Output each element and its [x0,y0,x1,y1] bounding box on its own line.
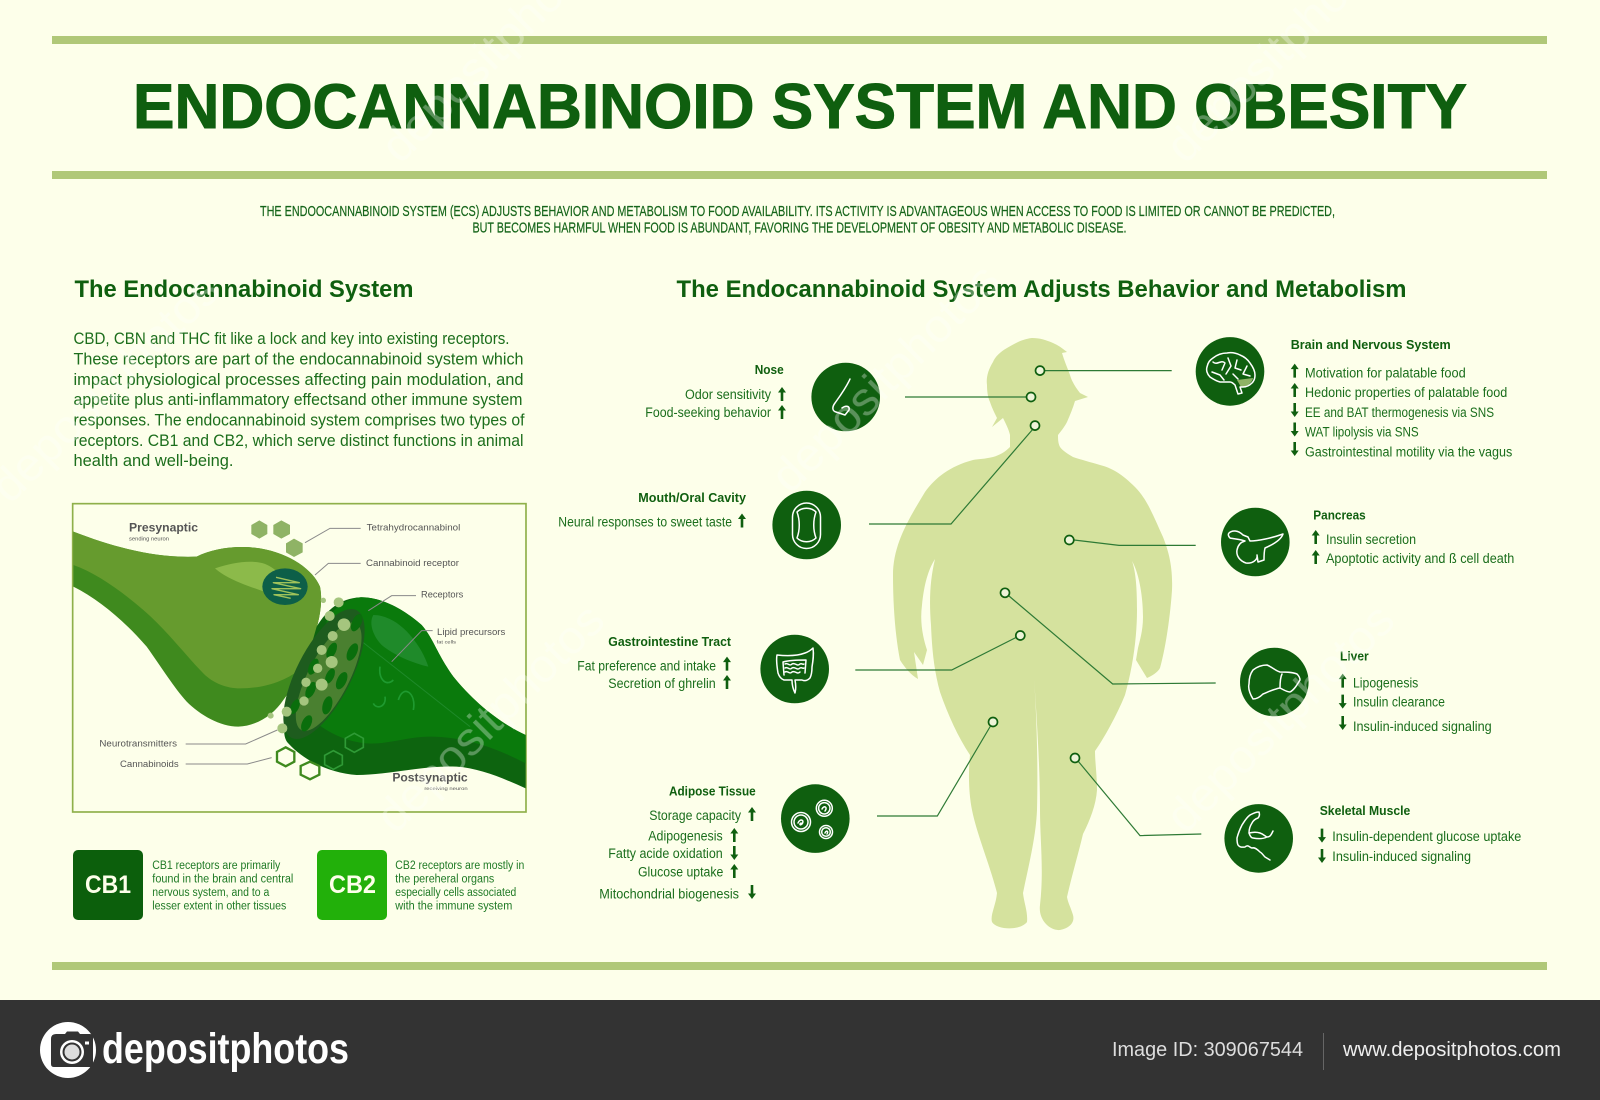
panel: gastrointestinal tract: Secretion of ghrelin [608,676,716,691]
panel: nose: Food-seeking behavior [645,405,771,420]
presynaptic neuron [73,532,321,727]
panel: nose: Nose [755,362,784,377]
watermark [0,0,1404,842]
diagram labels [99,521,506,792]
panel: liver: Lipogenesis [1353,676,1419,691]
diagram labels: Neurotransmitters [99,739,178,749]
receptor vesicle [262,568,308,605]
panel: pancreas: Apoptotic activity and ß cell death [1326,551,1514,566]
body paragraph: health and well-being. [74,452,234,470]
panel: CB2: CB2 receptors are mostly in [395,860,524,872]
diagram labels: sending neuron [129,536,169,542]
panel: liver [1240,648,1492,734]
panel: brain [1196,337,1513,459]
body silhouette [893,338,1172,930]
panel: adipose tissue: Adipogenesis [648,828,723,843]
panel: gastrointestinal tract: Gastrointestine Tract [608,634,732,649]
image id: Image ID: 309067544 [1112,1039,1303,1061]
panel: adipose tissue: Fatty acide oxidation [608,846,723,861]
intro text [260,203,1335,236]
footer bar [0,1000,1600,1100]
diagram labels: Receptors [421,589,464,599]
panel: gastrointestinal tract [577,634,829,703]
panel: CB1: found in the brain and central [152,874,293,886]
left heading: The Endocannabinoid System [74,276,414,303]
panel: skeletal muscle: Insulin-dependent glucose uptake [1332,829,1521,844]
panel: CB1: nervous system, and to a [152,887,270,899]
diagram labels: Presynaptic [129,521,198,535]
panel: adipose tissue: Glucose uptake [638,865,723,880]
panel: adipose tissue: Mitochondrial biogenesis [599,886,739,902]
website: www.depositphotos.com [1342,1039,1561,1061]
panel: CB1: CB1 [85,871,131,899]
panel: CB1: lesser extent in other tissues [152,900,287,912]
panel: adipose tissue: Storage capacity [649,808,741,823]
panel: liver: Liver [1340,648,1369,664]
panel: gastrointestinal tract: Fat preference and intake [577,658,716,673]
title rule [52,171,1547,179]
panel: brain: WAT lipolysis via SNS [1305,425,1419,440]
diagram labels: receiving neuron [424,786,468,792]
body paragraph: CBD, CBN and THC fit like a lock and key into existing receptors. [74,330,510,348]
panel: skeletal muscle [1224,803,1521,873]
panel: CB2: especially cells associated [395,887,516,899]
body paragraph: responses. The endocannabinoid system comprises two types of [74,412,525,430]
panel: CB2 [317,850,524,920]
panel: pancreas: Insulin secretion [1326,532,1416,547]
panel: brain: Motivation for palatable food [1305,365,1466,380]
hexagon molecules [251,520,363,779]
panel: liver: Insulin-induced signaling [1353,719,1492,734]
panel: CB1: CB1 receptors are primarily [152,860,281,872]
panel: skeletal muscle: Skeletal Muscle [1320,803,1410,818]
postsynaptic neuron [284,597,526,788]
panel: adipose tissue [599,784,850,902]
diagram labels: Lipid precursors [437,627,506,637]
panel: mouth [558,490,841,559]
diagram labels: Tetrahydrocannabinol [367,523,460,533]
panel: brain: Hedonic properties of palatable food [1305,385,1507,400]
panel: adipose tissue: Adipose Tissue [669,784,756,799]
bottom rule [52,962,1547,970]
panel: brain: EE and BAT thermogenesis via SNS [1305,405,1494,420]
diagram labels: Postsynaptic [392,771,468,785]
body paragraph [74,330,525,470]
body paragraph: receptors. CB1 and CB2, which serve distinct functions in animal [74,432,524,450]
watermark: depositphotos [365,593,614,842]
panel: pancreas: Pancreas [1313,507,1366,522]
panel: brain: Gastrointestinal motility via the vagus [1305,444,1513,459]
title: ENDOCANNABINOID SYSTEM AND OBESITY [133,72,1467,142]
panel: CB2: CB2 [329,871,376,899]
body paragraph: These receptors are part of the endocannabinoid system which [74,350,524,368]
panel: CB1 [73,850,293,920]
top rule [52,36,1547,44]
panel: liver: Insulin clearance [1353,695,1445,710]
watermark: depositphotos [1155,593,1404,842]
logo wordmark: depositphotos [102,1025,349,1073]
panel: mouth: Mouth/Oral Cavity [638,490,747,505]
leader lines [186,528,433,764]
body paragraph: impact physiological processes affecting pain modulation, and [74,371,524,389]
panel: mouth: Neural responses to sweet taste [558,514,732,530]
connector lines [855,366,1216,836]
panel: CB2: the pereheral organs [395,874,495,886]
diagram labels: Cannabinoid receptor [366,558,459,568]
body paragraph: appetite plus anti-inflammatory effectsand other immune system [74,391,522,409]
panel: CB2: with the immune system [394,900,512,912]
diagram labels: fat cells [437,639,457,645]
panel: skeletal muscle: Insulin-induced signaling [1332,849,1471,864]
diagram labels: Cannabinoids [120,759,179,769]
icon: logo camera [40,1022,96,1078]
panel: synapse diagram [73,504,526,812]
panel: nose [645,362,880,431]
panel: pancreas [1221,507,1514,576]
panel: nose: Odor sensitivity [685,387,771,402]
synaptic cleft [267,597,381,750]
watermark: depositphotos [760,253,1009,502]
right heading: The Endocannabinoid System Adjusts Behavior and Metabolism [676,276,1406,303]
intro text: BUT BECOMES HARMFUL WHEN FOOD IS ABUNDANT, FAVORING THE DEVELOPMENT OF OBESITY AND METABOLIC DISEASE. [472,220,1126,236]
panel: brain: Brain and Nervous System [1291,337,1451,352]
